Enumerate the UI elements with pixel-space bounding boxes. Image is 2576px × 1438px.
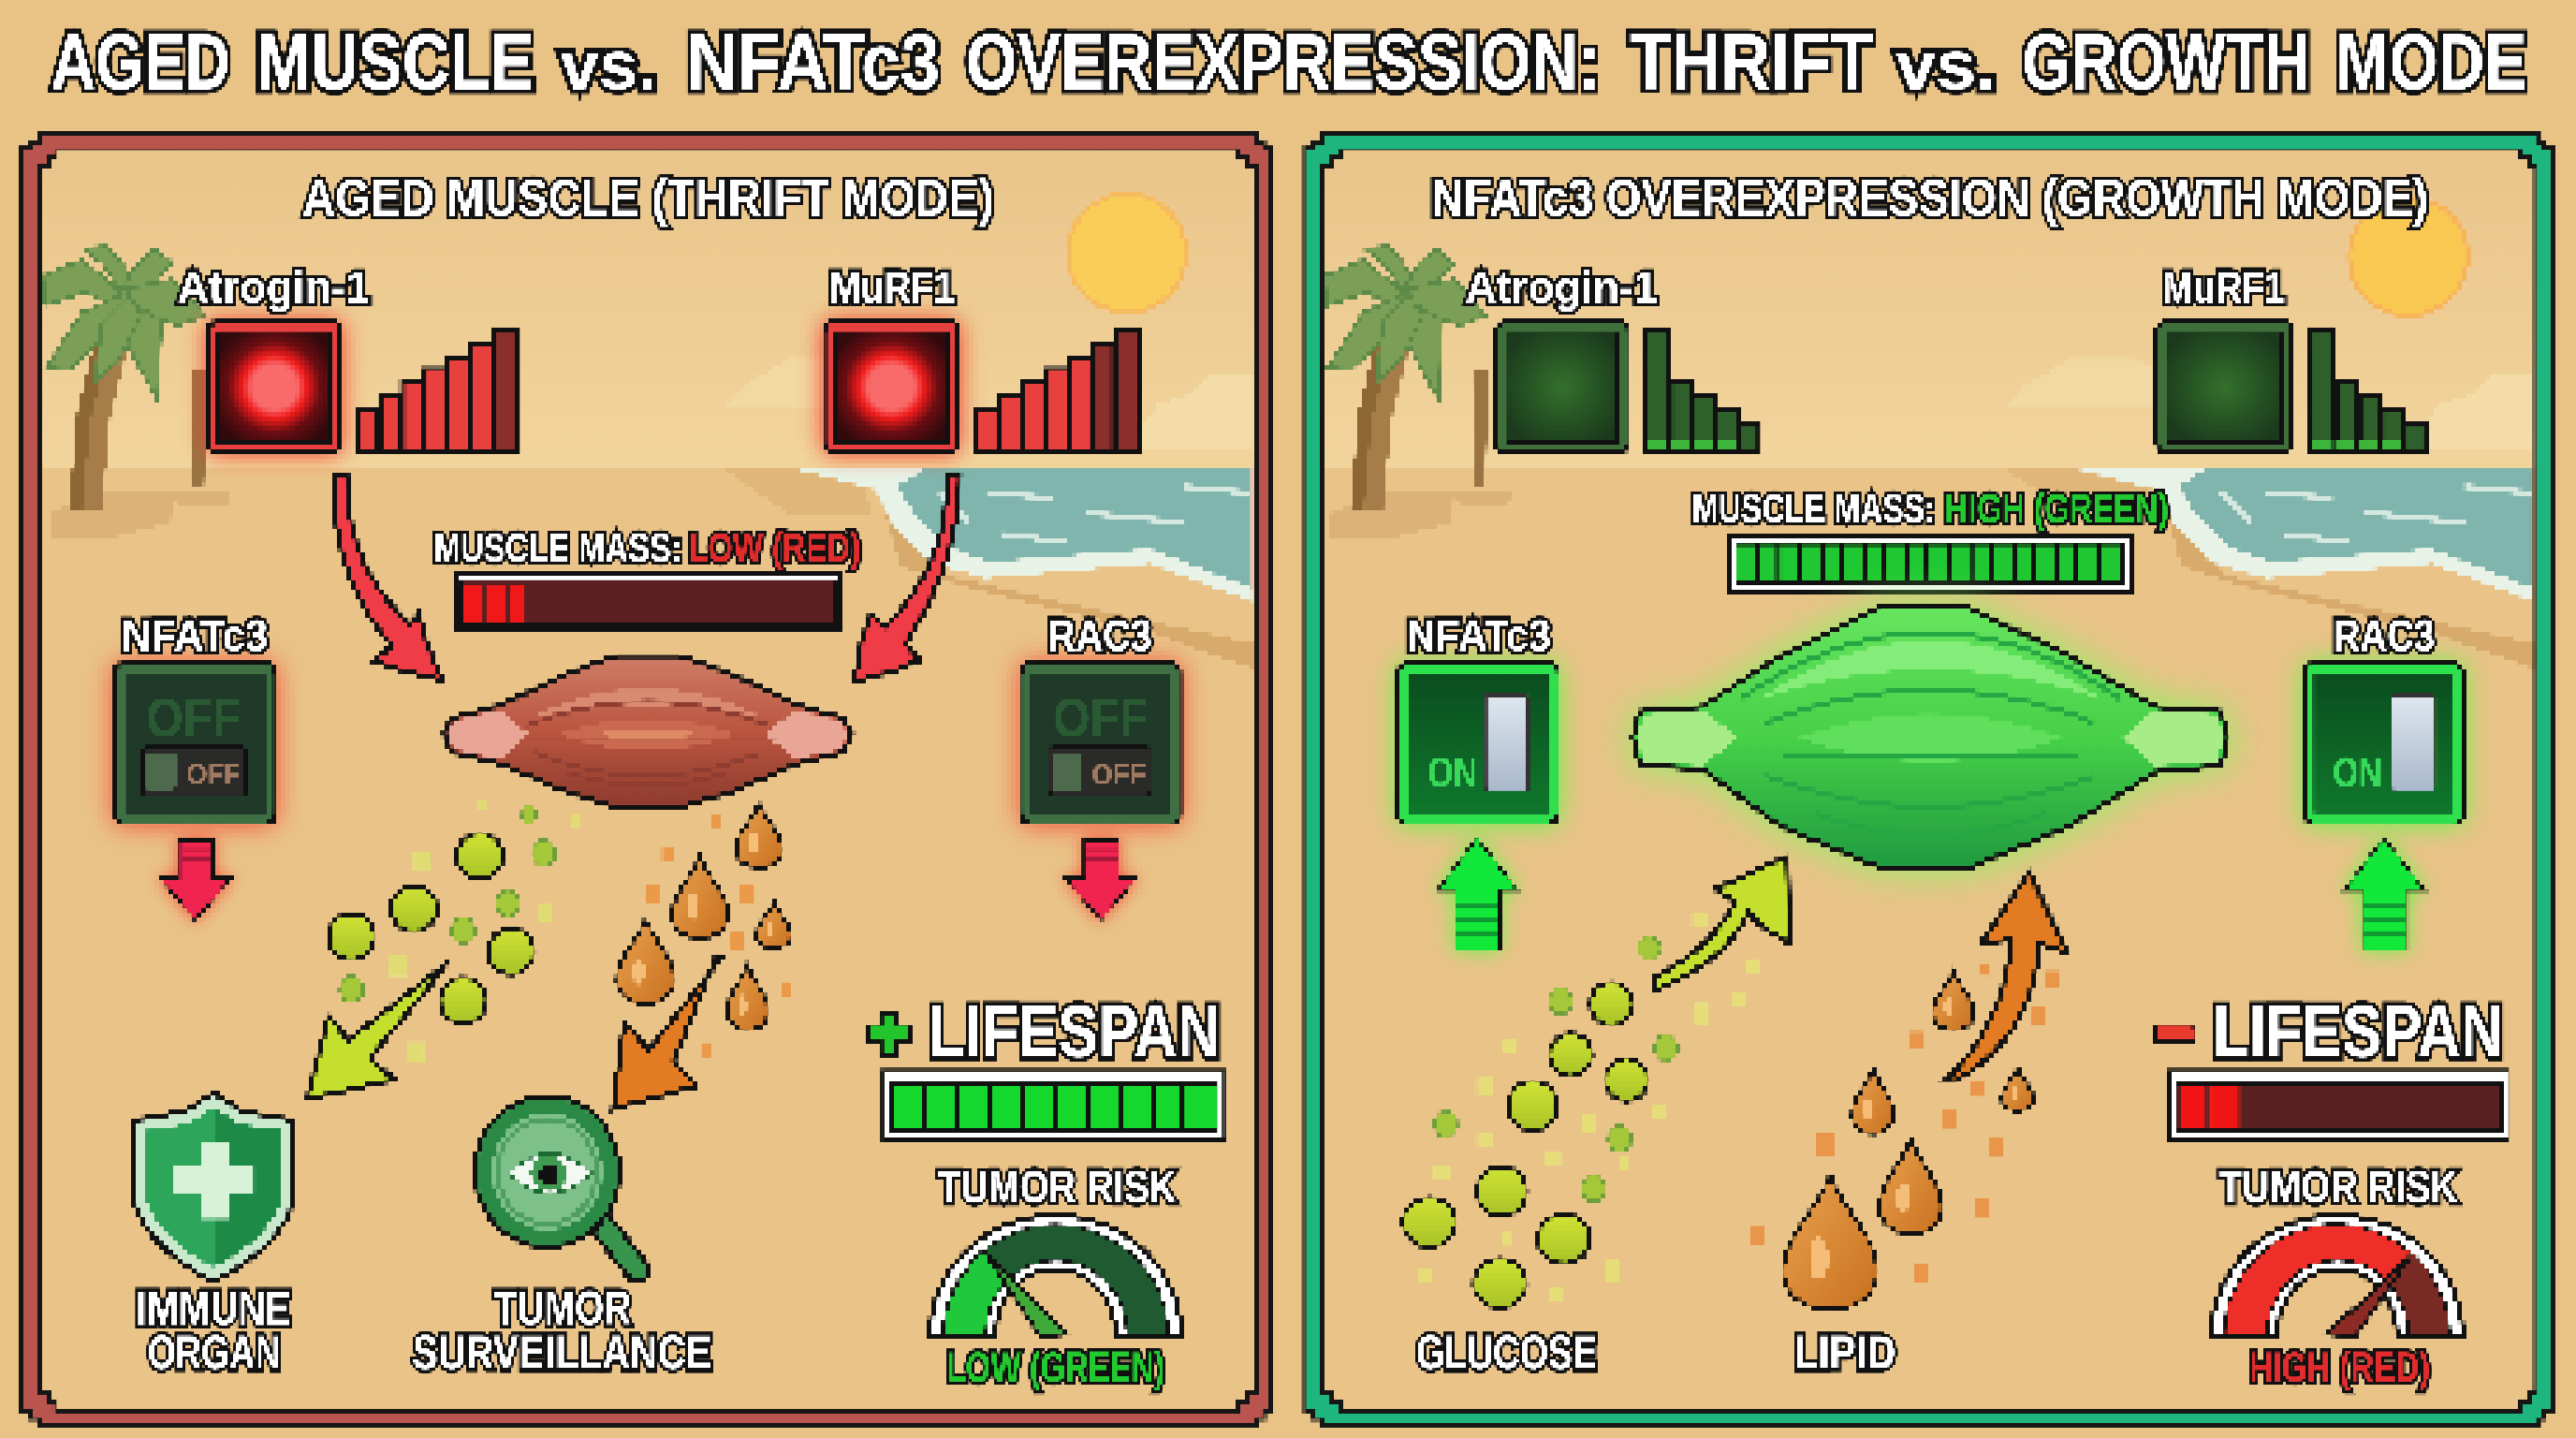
tumor risk low text: LOW (GREEN) [946, 1343, 1164, 1391]
icon: immune organ shield [133, 1093, 294, 1282]
arrow: MuRF1 to muscle [855, 475, 959, 682]
RAC3 label and off text [1048, 611, 1151, 790]
arrow: glucose to muscle [1653, 856, 1789, 992]
NFATc3 label and off text: OFF [146, 688, 242, 748]
immune organ label: IMMUNE [137, 1282, 291, 1335]
NFATc3 label and on text [1406, 611, 1551, 797]
beach background right [1314, 148, 2539, 1412]
lifespan label: LIFESPAN [929, 990, 1221, 1073]
lipid droplets [617, 803, 792, 1058]
tumor risk label: TUMOR RISK [2219, 1163, 2458, 1213]
RAC3 label and on text: ON [2333, 749, 2382, 797]
arrow: RAC3 down [1064, 840, 1137, 920]
RAC3 label and off text: OFF [1091, 759, 1146, 790]
arrow: Atrogin-1 to muscle [333, 475, 442, 681]
panel frame teal [1314, 141, 2545, 1418]
Atrogin-1 indicator [209, 322, 520, 452]
glucose particles [329, 799, 580, 1062]
NFATc3 label and on text: ON [1427, 749, 1477, 797]
title [51, 18, 2526, 106]
tumor surveillance label [413, 1282, 711, 1379]
lipid label: LIPID [1794, 1326, 1895, 1379]
title: AGED [51, 18, 230, 106]
glucose particles [1403, 912, 1758, 1308]
title: OVEREXPRESSION: [966, 18, 1600, 106]
tumor surveillance label: TUMOR [494, 1282, 631, 1335]
NFATc3 off switch [115, 664, 274, 823]
muscle mass label high: HIGH (GREEN) [1945, 486, 2169, 532]
tumor risk high text: HIGH (RED) [2249, 1343, 2430, 1391]
NFATc3 label and off text [122, 611, 268, 790]
sun left [1068, 194, 1186, 312]
panel: NFATc3 overexpression growth mode [1314, 141, 2545, 1418]
panel heading: AGED MUSCLE (THRIFT MODE) [302, 169, 994, 227]
icon: tumor surveillance magnifier [475, 1096, 637, 1270]
panel heading: NFATc3 OVEREXPRESSION (GROWTH MODE) [1431, 169, 2428, 227]
arrow: lipid to tumor surveillance [613, 956, 723, 1109]
tumor surveillance label: SURVEILLANCE [413, 1326, 711, 1379]
muscle mass label high [1692, 486, 2169, 532]
muscle mass label low: LOW (RED) [688, 525, 861, 571]
RAC3 on switch [2305, 664, 2463, 823]
RAC3 label and off text: RAC3 [1048, 611, 1151, 661]
muscle low [444, 655, 853, 809]
NFATc3 on switch [1398, 664, 1558, 823]
muscle mass label low: MUSCLE MASS: [433, 525, 681, 571]
glucose label: GLUCOSE [1416, 1326, 1597, 1379]
tumor risk label: TUMOR RISK [938, 1163, 1177, 1213]
muscle mass bar low [455, 574, 842, 631]
arrow: RAC3 up [2345, 838, 2425, 949]
icon: lifespan plus [868, 1014, 910, 1055]
NFATc3 label and off text: OFF [186, 759, 241, 790]
title: NFATc3 [687, 18, 940, 106]
lifespan label: LIFESPAN [2213, 990, 2504, 1073]
title: MUSCLE [256, 18, 534, 106]
title: THRIFT [1630, 18, 1873, 106]
immune organ label: ORGAN [148, 1326, 281, 1379]
tumor risk gauge low [929, 1215, 1181, 1336]
RAC3 label and on text: RAC3 [2333, 611, 2435, 661]
muscle mass bar high [1728, 536, 2130, 592]
RAC3 off switch [1022, 664, 1179, 823]
immune organ label [137, 1282, 291, 1379]
arrow: lipid to muscle [1945, 873, 2069, 1081]
Atrogin-1 label: Atrogin-1 [178, 263, 370, 313]
title: vs. [1895, 26, 1996, 104]
NFATc3 label and off text: NFATc3 [122, 611, 268, 661]
title: GROWTH [2023, 18, 2310, 106]
muscle mass label high: MUSCLE MASS: [1692, 486, 1936, 532]
beach background left [33, 148, 1257, 1412]
tumor risk gauge high [2211, 1215, 2463, 1336]
panel frame red [31, 141, 1264, 1418]
muscle high [1633, 608, 2228, 868]
MuRF1 label: MuRF1 [829, 263, 955, 313]
lipid droplets [1751, 962, 2058, 1310]
MuRF1 indicator [825, 322, 1140, 452]
lifespan bar full [884, 1071, 1225, 1140]
lifespan bar low [2169, 1071, 2509, 1140]
title: MODE [2336, 18, 2526, 106]
MuRF1 indicator off [2157, 322, 2425, 452]
icon: lifespan minus [2156, 1025, 2195, 1042]
Atrogin-1 label: Atrogin-1 [1466, 263, 1658, 313]
panel: aged muscle thrift mode [31, 141, 1264, 1418]
title: vs. [560, 26, 657, 104]
sun right [2349, 198, 2467, 315]
RAC3 label and on text [2333, 611, 2435, 797]
MuRF1 label: MuRF1 [2162, 263, 2285, 313]
RAC3 label and off text: OFF [1053, 688, 1149, 748]
arrow: NFATc3 up [1438, 838, 1518, 949]
arrow: glucose to immune organ [307, 964, 446, 1099]
Atrogin-1 indicator off [1497, 322, 1760, 452]
arrow: NFATc3 down [159, 840, 231, 920]
NFATc3 label and on text: NFATc3 [1406, 611, 1551, 661]
